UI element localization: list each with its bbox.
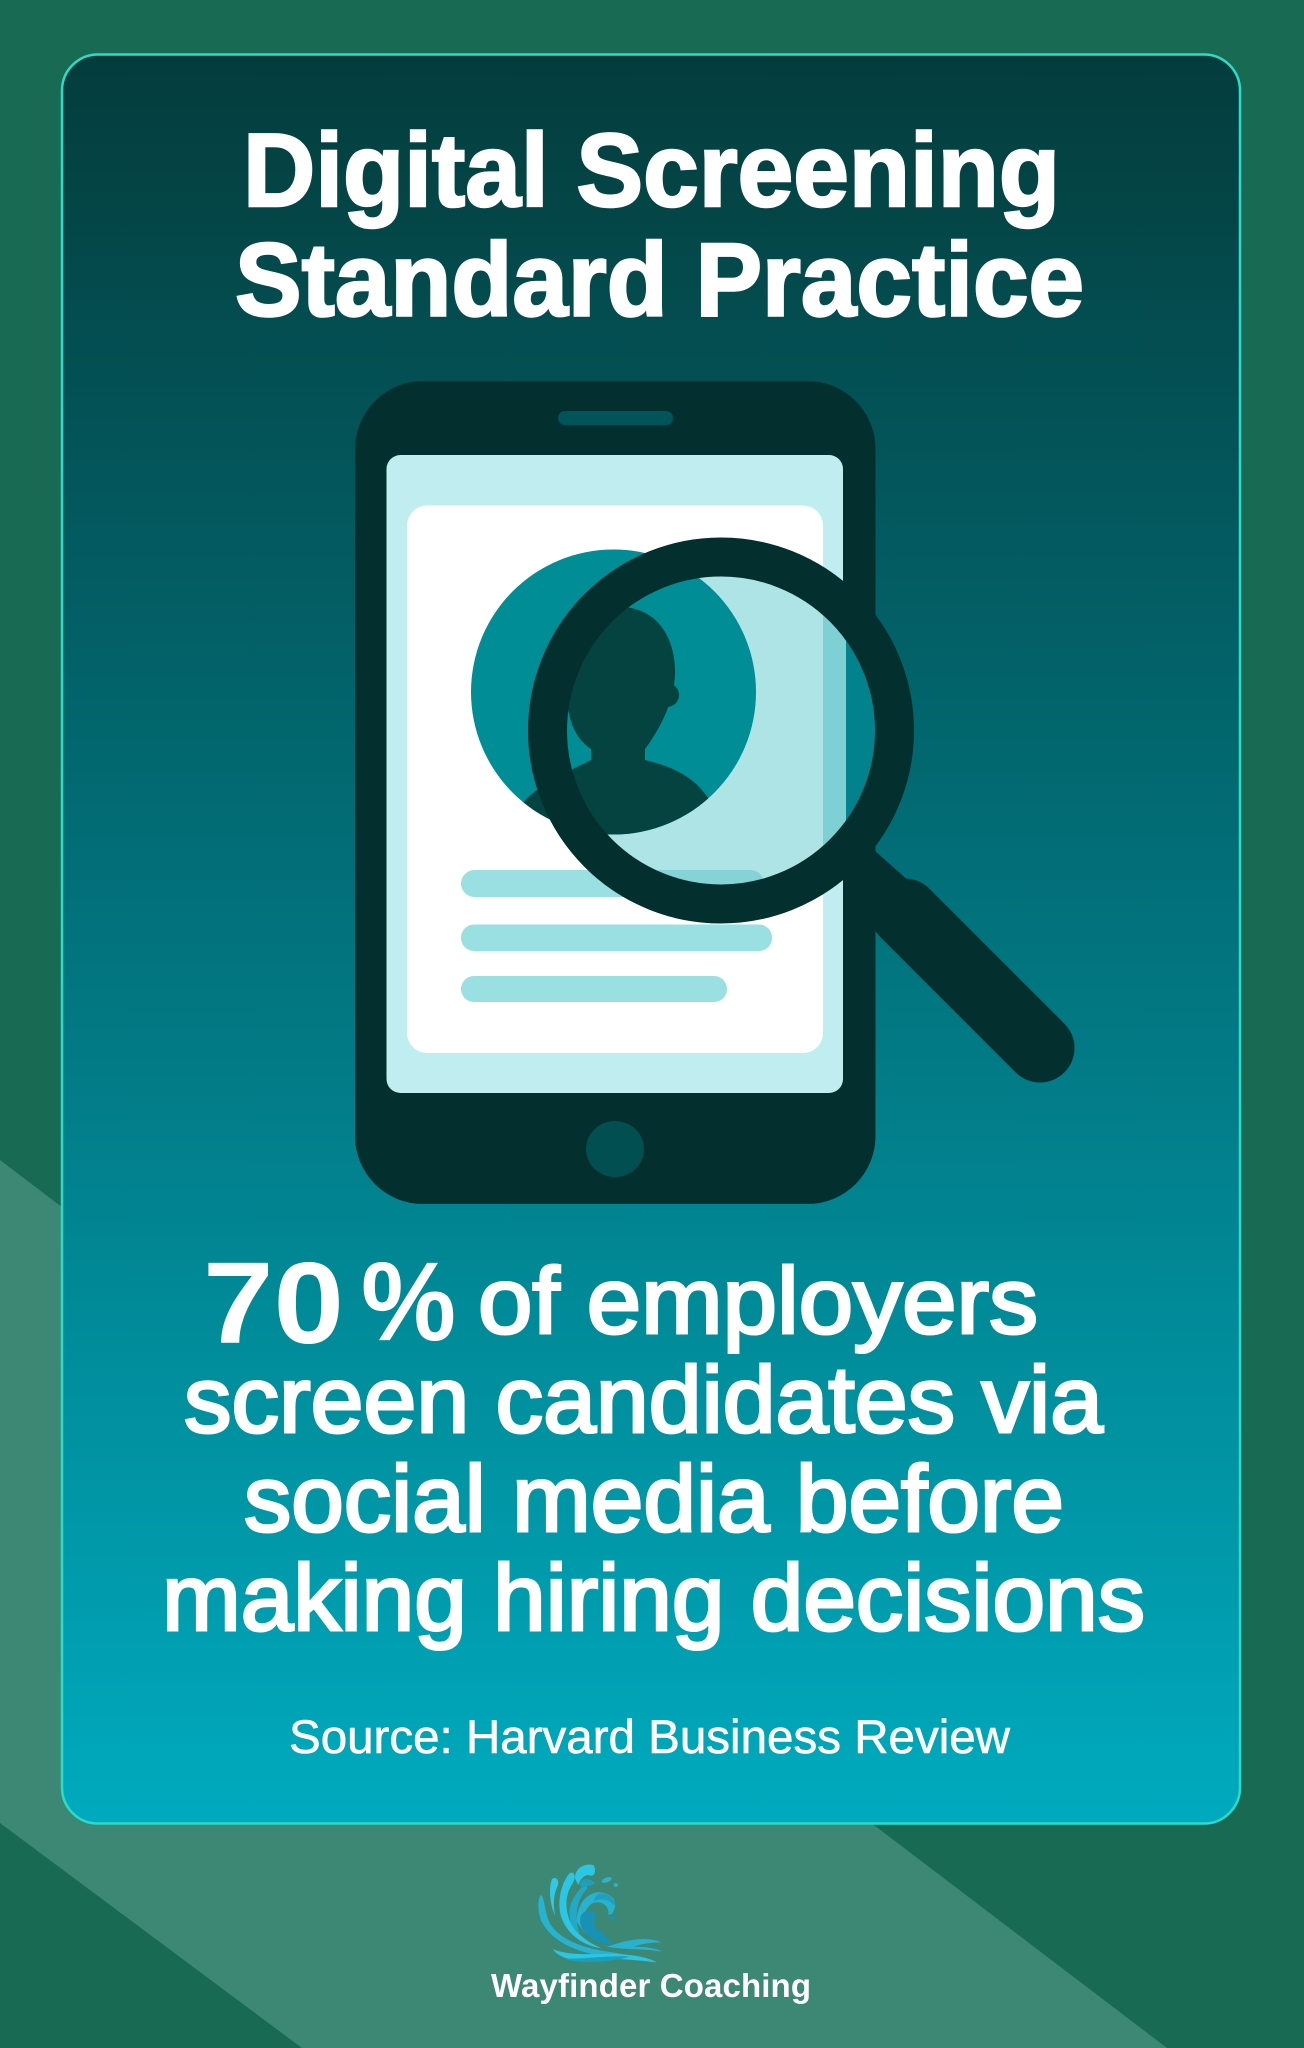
wordmark: Wayfinder Coaching [491,1967,811,2004]
magnifier handle [850,842,1040,1048]
70 percent: % [361,1239,456,1364]
magnifier ring [548,557,894,904]
title: Digital Screening [243,113,1060,229]
panel: main card [62,54,1240,1824]
statistic lines: social media before [244,1446,1064,1551]
statistic lines [162,1248,1145,1650]
statistic lines: making hiring decisions [162,1545,1145,1650]
source: Source: Harvard Business Review [289,1710,1011,1763]
icon: wave [538,1865,662,1962]
statistic lines: screen candidates via [184,1347,1104,1452]
70 percent: 70 [203,1238,344,1368]
statistic lines: of employers [478,1248,1038,1353]
icon: phone with magnifier [355,381,1040,1204]
phone screen [386,455,843,1093]
lens tint [608,576,875,884]
statistic text [162,1238,1145,1650]
title [235,113,1084,338]
title: Standard Practice [235,222,1084,338]
phone body [355,381,876,1204]
70 percent [203,1238,456,1368]
logo: Wayfinder Coaching [491,1865,811,2004]
profile text lines [461,870,772,1002]
profile avatar [471,550,756,834]
